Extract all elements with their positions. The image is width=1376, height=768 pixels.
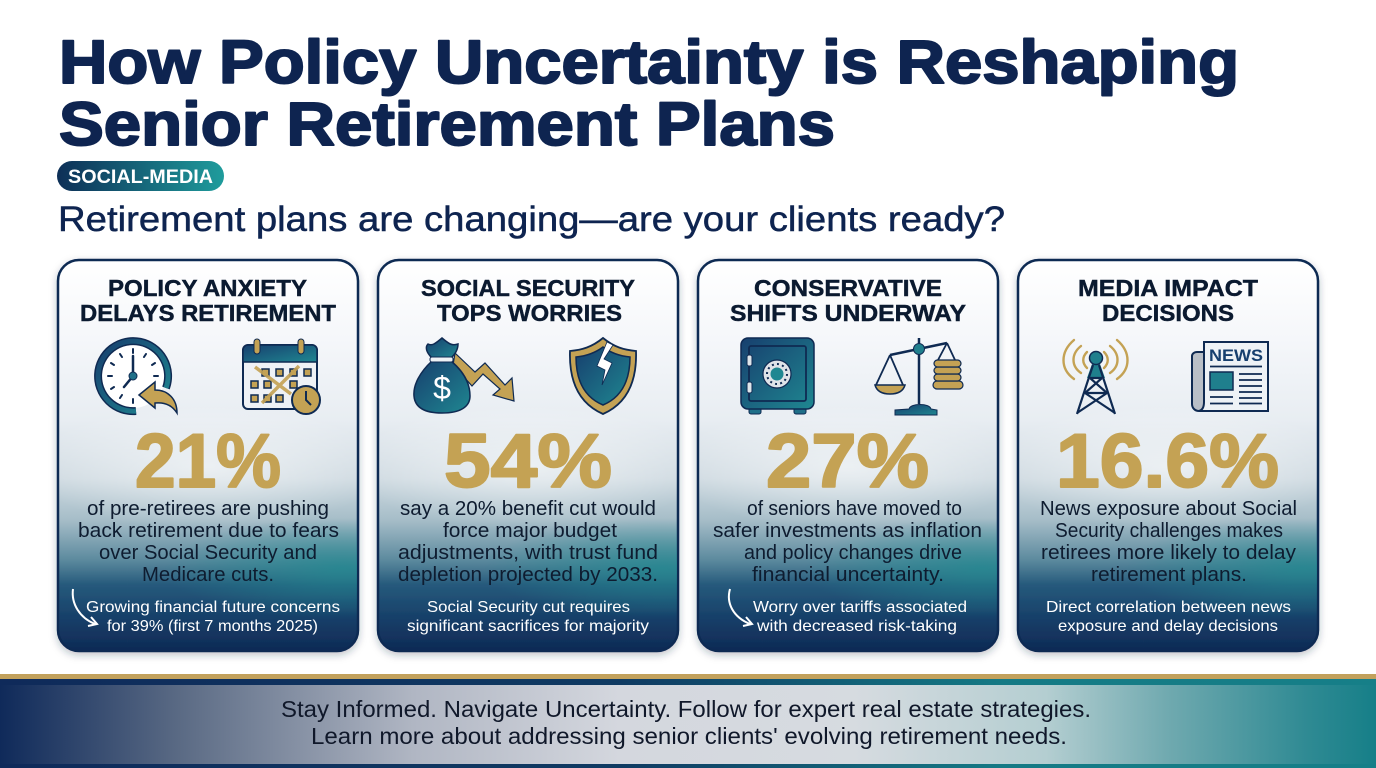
footer banner xyxy=(0,674,1376,768)
panel: media impact xyxy=(1018,260,1318,651)
body text: say a 20% benefit cut would xyxy=(400,498,656,520)
body text: retirement plans. xyxy=(1091,564,1247,586)
body text xyxy=(398,498,658,586)
icon: curved arrow xyxy=(729,589,752,626)
heading: POLICY ANXIETY xyxy=(108,275,307,301)
title: How Policy Uncertainty is Reshaping xyxy=(59,28,1239,96)
title: Senior Retirement Plans xyxy=(59,90,835,158)
body text xyxy=(78,498,339,586)
icon: newspaper: NEWS xyxy=(1209,346,1263,365)
statistic: 27% xyxy=(766,419,929,504)
icon: balance scale with coins xyxy=(875,338,963,415)
icon: curved arrow xyxy=(73,589,97,626)
footer text: Learn more about addressing senior clients' evolving retirement needs. xyxy=(311,723,1067,749)
note xyxy=(1046,599,1291,635)
icon: clock with back arrow xyxy=(98,341,177,413)
footer text xyxy=(281,696,1091,749)
heading xyxy=(421,275,635,326)
icon: money bag with falling arrow xyxy=(414,338,514,413)
body text: Security challenges makes xyxy=(1055,520,1283,542)
heading: DECISIONS xyxy=(1102,300,1234,326)
note: Social Security cut requires xyxy=(427,599,630,616)
note: for 39% (first 7 months 2025) xyxy=(107,618,318,635)
icon: cracked shield xyxy=(570,338,636,414)
note: Worry over tariffs associated xyxy=(753,599,967,616)
icon: safe xyxy=(741,338,814,414)
body text: of pre-retirees are pushing xyxy=(87,498,329,520)
note: with decreased risk-taking xyxy=(756,618,957,635)
body text: depletion projected by 2033. xyxy=(398,564,658,586)
heading xyxy=(1078,275,1259,326)
statistic: 16.6% xyxy=(1056,419,1279,504)
heading: MEDIA IMPACT xyxy=(1078,275,1259,301)
body text: Medicare cuts. xyxy=(142,564,274,586)
note xyxy=(753,599,967,635)
note: significant sacrifices for majority xyxy=(407,618,649,635)
heading: SHIFTS UNDERWAY xyxy=(730,300,966,326)
tag pill: social-media xyxy=(57,161,224,191)
body text: over Social Security and xyxy=(99,542,317,564)
body text: back retirement due to fears xyxy=(78,520,339,542)
body text: financial uncertainty. xyxy=(752,564,944,586)
note: exposure and delay decisions xyxy=(1058,618,1278,635)
body text xyxy=(1040,498,1297,586)
heading xyxy=(730,275,966,326)
body text: force major budget xyxy=(443,520,617,542)
body text: News exposure about Social xyxy=(1040,498,1297,520)
card background 4 xyxy=(1018,260,1318,651)
card background 1 xyxy=(58,260,358,651)
heading: CONSERVATIVE xyxy=(754,275,942,301)
note: Growing financial future concerns xyxy=(86,599,340,616)
icon: newspaper xyxy=(1192,342,1268,411)
subtitle: Retirement plans are changing—are your clients ready? xyxy=(58,200,1005,239)
note: Direct correlation between news xyxy=(1046,599,1291,616)
tag pill: social-media: SOCIAL-MEDIA xyxy=(68,167,213,188)
body text: and policy changes drive xyxy=(744,542,962,564)
icon: calendar with cross and clock xyxy=(243,339,320,414)
statistic: 21% xyxy=(135,419,281,504)
card background 2 xyxy=(378,260,678,651)
heading: SOCIAL SECURITY xyxy=(421,275,635,301)
body text xyxy=(713,498,982,586)
panel: policy anxiety xyxy=(58,260,358,651)
panel: conservative shifts xyxy=(698,260,998,651)
heading xyxy=(80,275,337,326)
statistic: 54% xyxy=(444,419,612,504)
body text: of seniors have moved to xyxy=(747,498,962,520)
body text: adjustments, with trust fund xyxy=(398,542,658,564)
note xyxy=(407,599,649,635)
card background 3 xyxy=(698,260,998,651)
icon: broadcast tower xyxy=(1064,340,1128,414)
title xyxy=(59,28,1239,158)
heading: TOPS WORRIES xyxy=(437,300,622,326)
body text: retirees more likely to delay xyxy=(1041,542,1296,564)
heading: DELAYS RETIREMENT xyxy=(80,300,337,326)
body text: safer investments as inflation xyxy=(713,520,982,542)
footer text: Stay Informed. Navigate Uncertainty. Follow for expert real estate strategies. xyxy=(281,696,1091,722)
icon: money bag with falling arrow: $ xyxy=(433,370,451,406)
note xyxy=(86,599,340,635)
panel: social security xyxy=(378,260,678,651)
